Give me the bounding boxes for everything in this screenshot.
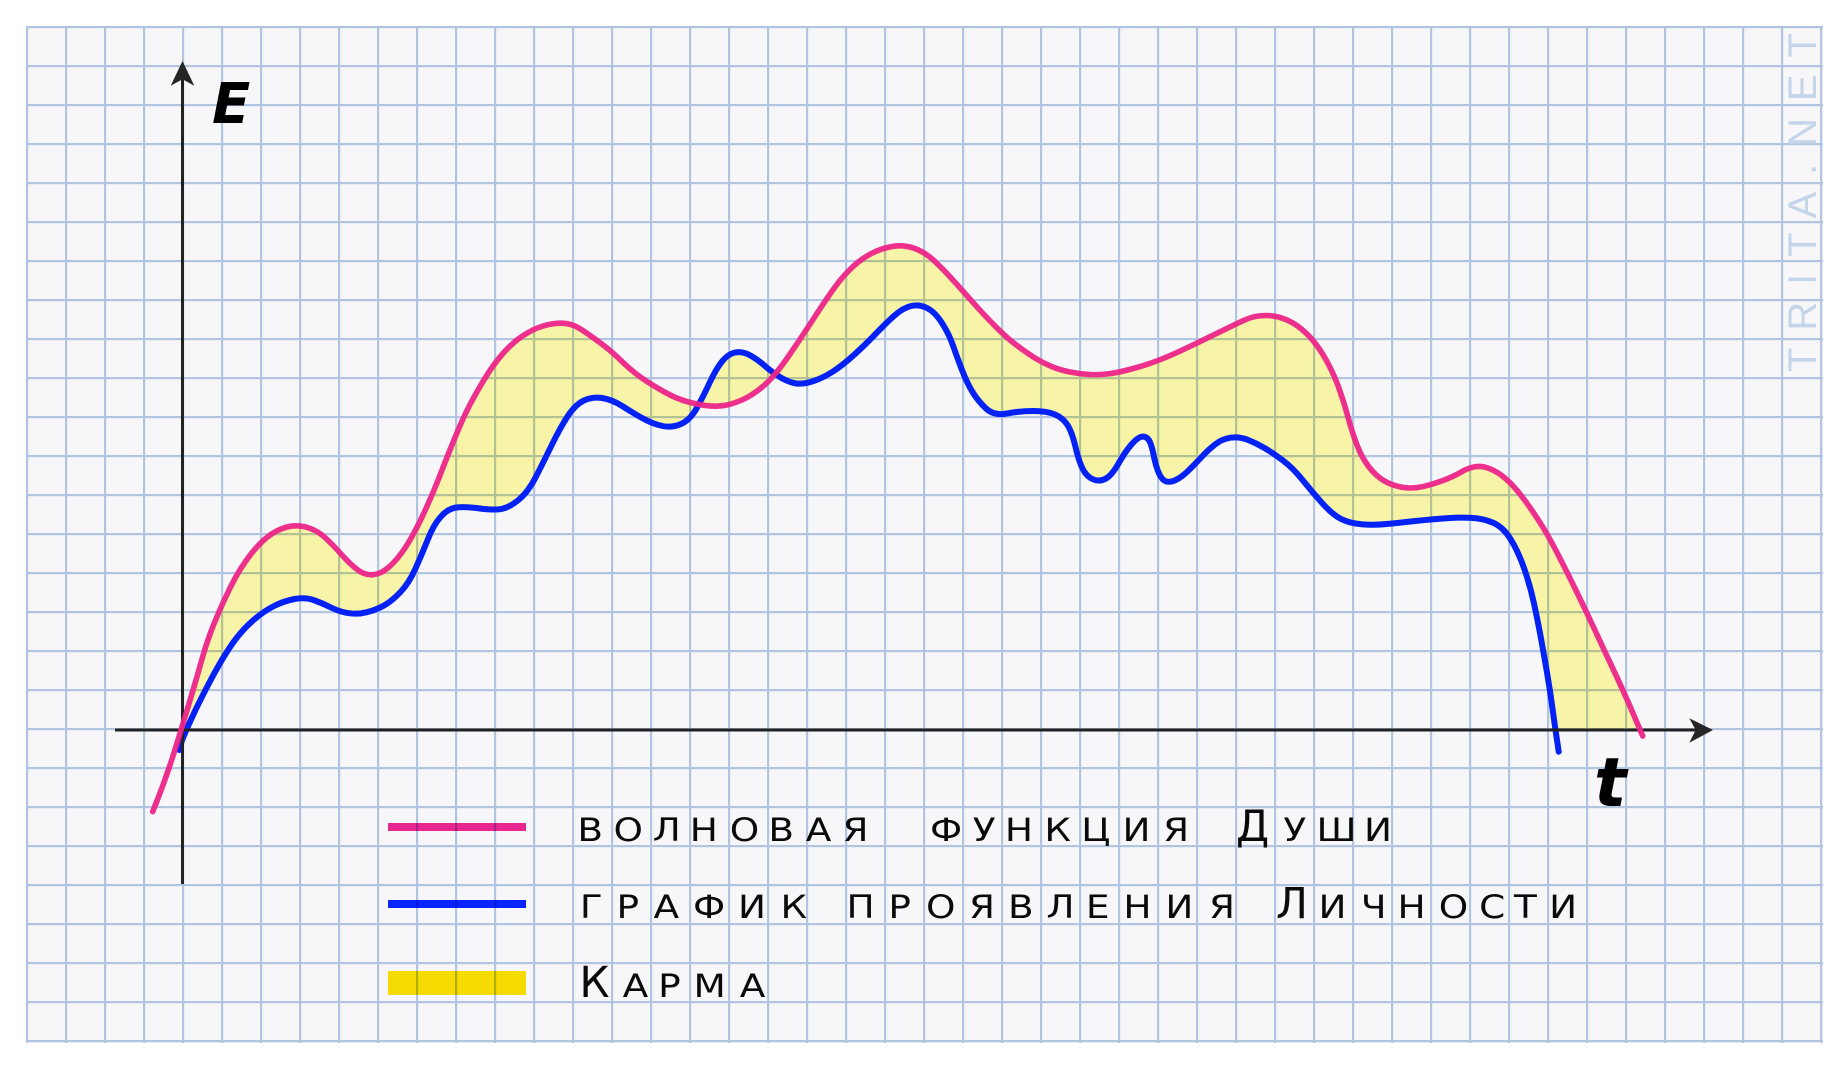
legend row: soul wave function: ВОЛНОВАЯ ФУНКЦИЯ: [577, 813, 1189, 849]
legend row: personality manifestation: Л: [1276, 880, 1308, 929]
blue curve: personality manifestation: [179, 305, 1559, 752]
legend row: personality manifestation: ГРАФИК ПРОЯВЛЕНИЯ: [580, 890, 1235, 926]
chart: energy over time: [115, 61, 1713, 884]
watermark: TRITA.NET: TRITA.NET: [1781, 16, 1825, 372]
legend row: personality manifestation: ИЧНОСТИ: [1318, 890, 1577, 926]
legend row: karma: [388, 959, 766, 1008]
legend row: soul wave function: Д: [1236, 803, 1269, 852]
horizontal axis t with arrow: [115, 718, 1713, 743]
karma area between curves: [186, 248, 1636, 728]
axis label E: E: [212, 72, 250, 137]
vertical axis E with arrow: [171, 61, 194, 884]
pink curve: soul wave function: [153, 246, 1643, 812]
legend: [388, 803, 1577, 1008]
axis label t: t: [1594, 744, 1629, 823]
legend row: soul wave function: [388, 803, 1392, 852]
legend row: soul wave function: УШИ: [1283, 813, 1392, 849]
legend row: karma: АРМА: [623, 969, 766, 1005]
legend row: personality manifestation: [388, 880, 1577, 929]
legend row: karma: К: [579, 959, 610, 1008]
